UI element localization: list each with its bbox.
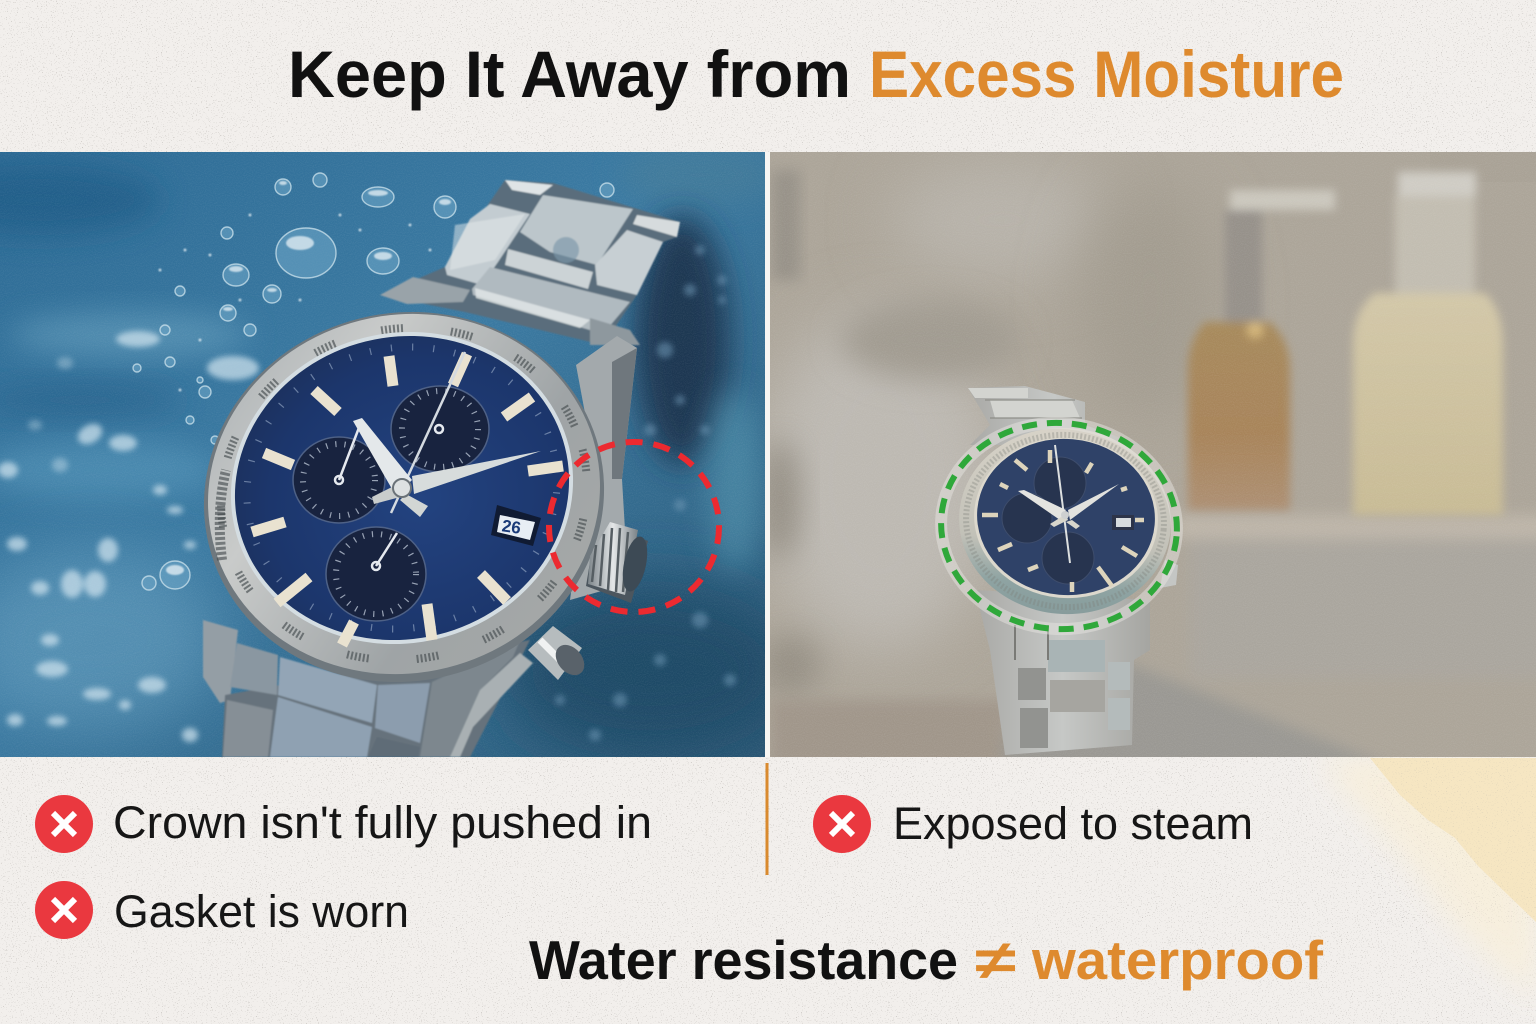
hour markers — [252, 354, 563, 645]
closing statement: Water resistance — [529, 929, 958, 991]
date window: 26 — [501, 516, 522, 538]
icon: red x, gasket — [35, 881, 93, 939]
text: gasket is worn: Gasket is worn — [114, 886, 409, 937]
blurred cream bottle — [1353, 172, 1503, 515]
water background — [0, 145, 800, 760]
bubble highlights — [158, 181, 451, 575]
vertical orange divider — [766, 763, 768, 875]
soft blurred droplets — [0, 331, 259, 742]
chronograph pusher — [528, 626, 584, 680]
closing statement: waterproof — [1031, 929, 1324, 991]
bubbles — [133, 173, 614, 590]
watch hands — [353, 352, 541, 517]
green dashed highlight ellipse — [932, 413, 1186, 639]
dial, right watch — [977, 438, 1155, 596]
closing statement: ≠ — [975, 929, 1016, 991]
lower bracelet, right watch — [975, 590, 1150, 755]
blurred shelf — [1182, 515, 1536, 542]
panel: steamy bathroom watch photo — [760, 152, 1536, 770]
hour markers, right watch — [982, 450, 1144, 592]
icon: red x, steam — [813, 795, 871, 853]
title — [288, 37, 1344, 111]
lower bracelet — [203, 620, 533, 757]
blurred countertop — [770, 665, 1366, 757]
icon: red x, crown — [35, 795, 93, 853]
yellow paint stain, bottom right — [1320, 758, 1536, 1000]
blurred amber bottle with pump — [1188, 190, 1335, 510]
list: right cause — [813, 795, 1253, 853]
sub-dials, right watch — [1002, 457, 1094, 584]
text: crown isn't fully pushed in: Crown isn't fully pushed in — [113, 797, 652, 848]
crown, right watch — [1160, 560, 1178, 588]
title: Excess Moisture — [869, 37, 1344, 111]
list: left causes — [35, 795, 652, 939]
text: exposed to steam: Exposed to steam — [893, 798, 1253, 849]
grain — [1190, 323, 1288, 502]
panel: underwater watch photo — [0, 145, 800, 760]
watch hands, right watch — [1018, 445, 1119, 563]
sub-dials — [293, 386, 489, 621]
bezel, right watch — [959, 428, 1171, 614]
date window, right watch — [1112, 515, 1134, 530]
upper bracelet, right watch — [968, 386, 1119, 445]
steam background — [760, 152, 1536, 757]
centre divider between photos — [765, 152, 770, 757]
bezel — [204, 312, 604, 682]
winding crown — [586, 522, 652, 603]
dark water bokeh beside bracelet — [555, 245, 736, 741]
closing statement — [529, 929, 1324, 991]
title: Keep It Away from — [288, 37, 851, 111]
red dashed highlight circle around crown — [549, 442, 719, 612]
crystal and dial — [231, 332, 573, 644]
upper bracelet — [380, 180, 680, 345]
case and right lug — [570, 336, 637, 600]
date window — [491, 505, 541, 546]
